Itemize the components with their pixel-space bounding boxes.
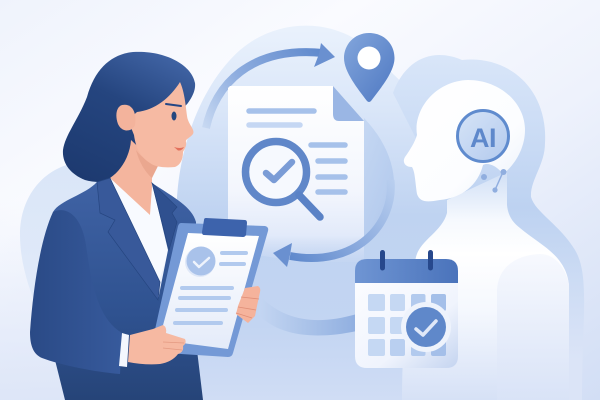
panel: AI human silhouette [402,80,569,400]
clipboard check badge [185,246,216,277]
left hand [128,325,186,364]
panel: woman [30,52,268,400]
right hand [236,286,260,323]
document sheet [228,86,364,262]
calendar rings [382,252,430,268]
AI badge: AI [470,123,496,153]
eyebrow [166,104,181,106]
arrow: top cycle arrow [206,43,335,128]
left background blob [20,163,150,400]
calendar check badge [401,302,451,352]
shirt [110,178,169,284]
panel: document [228,86,364,262]
icon: location pin [344,33,394,102]
panel: calendar [355,252,458,368]
eye [172,112,176,120]
neck [110,140,152,218]
calendar header [355,259,458,283]
clipboard board [150,223,268,357]
jacket torso [40,182,203,400]
arrow: bottom cycle arrow [273,180,391,267]
AI badge [458,110,508,162]
calendar body [355,283,458,368]
lower arc band [258,298,357,335]
neural nodes [481,169,506,193]
silhouette arm panel [497,254,569,400]
ear [116,105,135,130]
neck shadow [136,150,158,178]
document fold [333,86,364,121]
silhouette head [404,80,525,201]
right lapel [152,183,177,250]
clipboard [150,218,268,357]
clipboard text lines [175,253,246,323]
jacket sleeve [30,210,122,374]
face [128,82,193,167]
clipboard paper [159,233,259,349]
central background blob [177,26,470,400]
calendar cells [368,294,446,356]
clipboard clip [202,218,247,237]
crescent behind document [345,118,394,252]
lips [174,147,184,151]
silhouette body [402,172,569,400]
human halo [393,55,584,400]
shirt cuff [119,333,129,367]
document text lines [249,111,345,192]
hair [63,52,195,182]
left lapel [97,178,160,300]
icon: magnifying glass with check [246,142,320,217]
